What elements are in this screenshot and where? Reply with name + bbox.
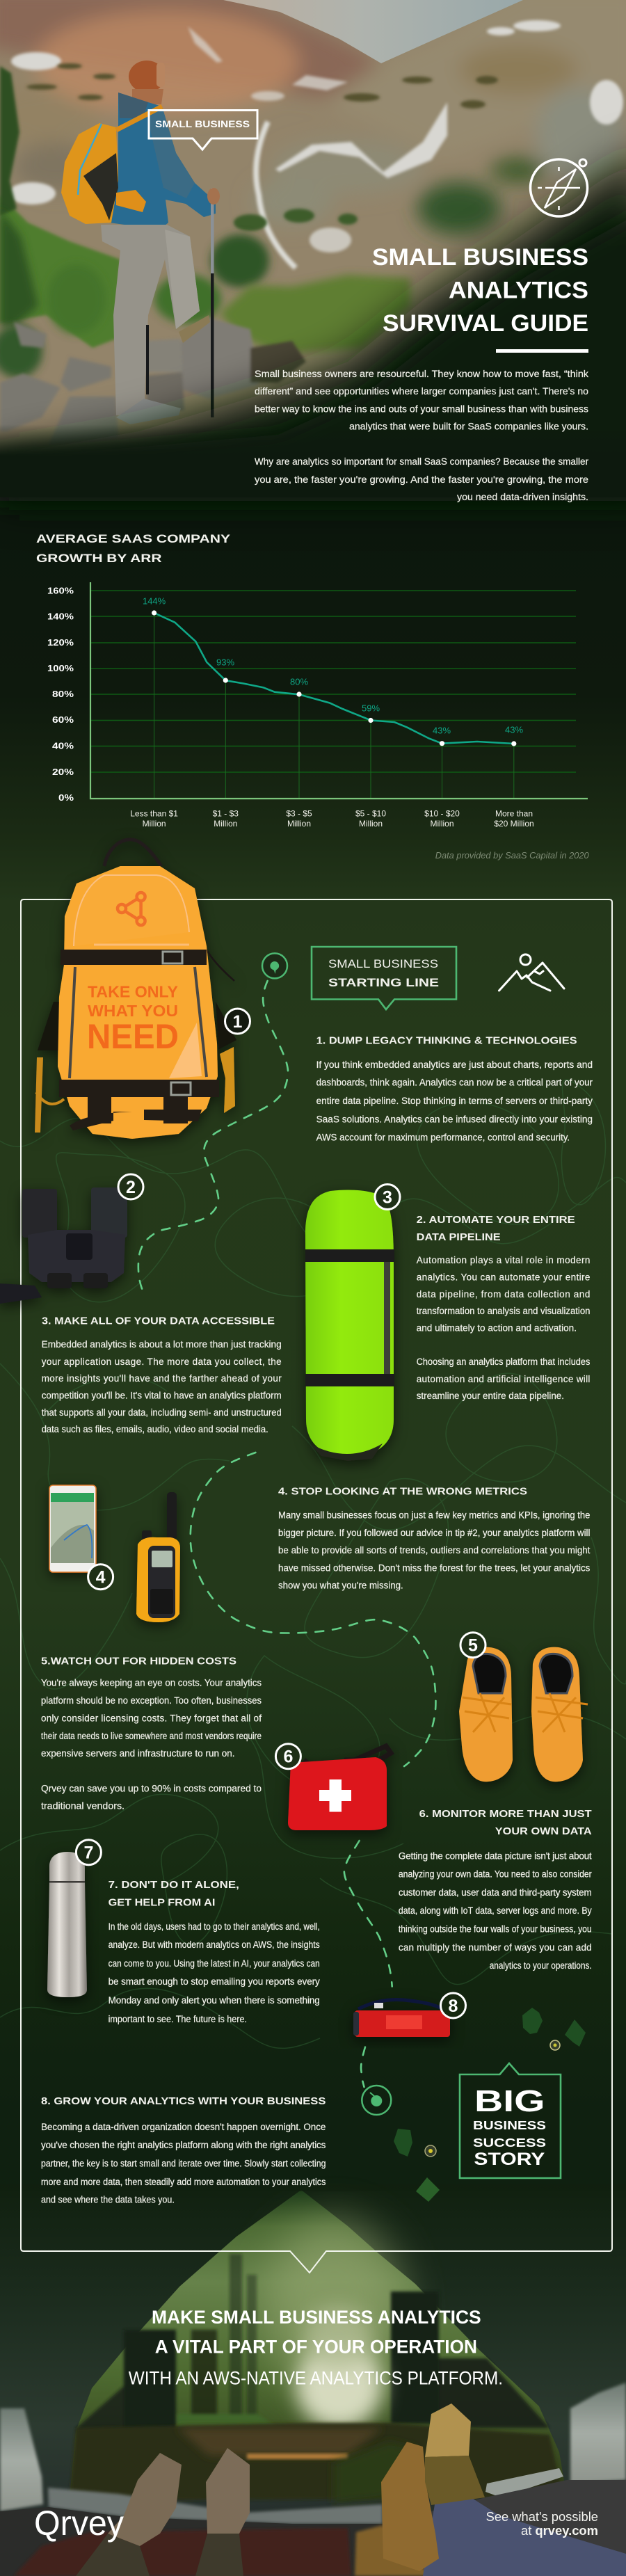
tip 5 body: only consider licensing costs. They forget that all of bbox=[41, 1713, 262, 1723]
icon: compass bbox=[530, 159, 587, 216]
line chart: growth by ARR: Million bbox=[359, 819, 383, 829]
marker 7: 7 bbox=[83, 1843, 93, 1863]
tip 5 body: You're always keeping an eye on costs. Your analytics bbox=[41, 1678, 262, 1688]
tip 8 body: and see where the data takes you. bbox=[41, 2195, 175, 2205]
tip 2 bbox=[417, 1214, 591, 1401]
line chart: growth by ARR: 43% bbox=[505, 725, 523, 735]
line chart: growth by ARR: Million bbox=[143, 819, 166, 829]
line chart: growth by ARR: 100% bbox=[47, 664, 74, 673]
jeans bbox=[423, 2493, 626, 2576]
tip 5 bbox=[41, 1655, 262, 1811]
tip 6 body: thinking outside the four walls of your business, you bbox=[399, 1923, 592, 1934]
tip 2 heading: 2. AUTOMATE YOUR ENTIRE bbox=[417, 1214, 575, 1226]
callout: starting line: STARTING LINE bbox=[328, 976, 439, 989]
marker 2 bbox=[118, 1174, 143, 1199]
tip 3 body: that supports all your data, including semi- and unstructured bbox=[42, 1407, 282, 1418]
closing headline bbox=[129, 2307, 503, 2389]
icon: flashlight bbox=[353, 1999, 450, 2037]
line chart: growth by ARR: Less than $1 bbox=[130, 808, 178, 818]
tip 5 body: platform should be no exception. Too often, businesses bbox=[41, 1695, 262, 1706]
tip 6 bbox=[399, 1808, 592, 1971]
title: ANALYTICS bbox=[449, 277, 588, 303]
callout: big business success story: BUSINESS bbox=[473, 2118, 546, 2132]
tip 6 body: customer data, user data and third-party system bbox=[399, 1887, 592, 1898]
tip 8 body bbox=[41, 2122, 326, 2205]
tip 5 body: their data needs to live somewhere and most vendors require bbox=[41, 1731, 262, 1741]
line chart: growth by ARR bbox=[47, 582, 588, 829]
tip 6 heading: YOUR OWN DATA bbox=[495, 1825, 592, 1837]
tip 2 body: Choosing an analytics platform that includes bbox=[417, 1357, 591, 1367]
tip 7 body: In the old days, users had to go to their analytics and, well, bbox=[109, 1921, 320, 1932]
tip 1 body: If you think embedded analytics are just about charts, reports and bbox=[316, 1059, 593, 1070]
intro text: Small business owners are resourceful. They know how to move fast, “think bbox=[255, 369, 588, 379]
tip 2 body bbox=[417, 1255, 591, 1401]
tip 7 body: important to see. The future is here. bbox=[109, 2014, 247, 2024]
tip 8 body: more and more data, then steadily add more automation to your analytics bbox=[41, 2177, 326, 2187]
title: SURVIVAL GUIDE bbox=[383, 310, 588, 337]
tip 3 bbox=[42, 1315, 282, 1434]
tip 5 body bbox=[41, 1678, 262, 1811]
line chart: growth by ARR: 59% bbox=[362, 703, 380, 713]
line chart: growth by ARR: 93% bbox=[216, 657, 234, 667]
tip 7 heading bbox=[109, 1879, 239, 1908]
tip 8 bbox=[41, 2095, 326, 2205]
tip 6 body: analytics to your operations. bbox=[490, 1960, 592, 1971]
tip 1 body: AWS account for maximum performance, control and security. bbox=[316, 1133, 570, 1143]
tip 1 body bbox=[316, 1059, 593, 1143]
tip 6 body: Getting the complete data picture isn't just about bbox=[399, 1851, 592, 1862]
call to action: See what's possible bbox=[486, 2510, 598, 2524]
tip 6 body: analyzing your own data. You need to also consider bbox=[399, 1869, 592, 1880]
tip 5 heading: 5.WATCH OUT FOR HIDDEN COSTS bbox=[41, 1655, 236, 1667]
line chart: growth by ARR: 144% bbox=[143, 596, 166, 607]
tip 7 heading: 7. DON'T DO IT ALONE, bbox=[109, 1879, 239, 1891]
tip 3 body: competition you'll be. It's vital to have an analytics platform bbox=[42, 1390, 282, 1401]
tip 3 body: Embedded analytics is about a lot more than just tracking bbox=[42, 1339, 282, 1350]
tip 2 body: and ultimately to action and activation. bbox=[417, 1323, 577, 1334]
marker 8 bbox=[441, 1993, 466, 2018]
intro text: you are, the faster you're growing. And the faster you're growing, the more bbox=[255, 474, 588, 485]
intro text: Why are analytics so important for small SaaS companies? Because the smaller bbox=[255, 456, 588, 467]
backpack slogan: TAKE ONLY bbox=[88, 982, 178, 1000]
icon: binoculars bbox=[0, 1187, 127, 1304]
line chart: growth by ARR: Million bbox=[430, 819, 454, 829]
tip 1 body: SaaS solutions. Analytics can be infused directly into your existing bbox=[316, 1114, 593, 1124]
line chart: growth by ARR: Million bbox=[214, 819, 237, 829]
marker 8: 8 bbox=[449, 1997, 458, 2016]
marker 4: 4 bbox=[96, 1568, 106, 1587]
tip 2 heading bbox=[417, 1214, 575, 1243]
trousers bbox=[101, 225, 200, 415]
closing headline: WITH AN AWS-NATIVE ANALYTICS PLATFORM. bbox=[129, 2368, 503, 2389]
icon: start pin bbox=[262, 953, 287, 978]
call to action bbox=[486, 2510, 598, 2538]
intro text: better way to know the ins and outs of your small business than with business bbox=[255, 403, 588, 415]
chart heading: AVERAGE SAAS COMPANY bbox=[36, 532, 231, 545]
marker 6: 6 bbox=[283, 1747, 293, 1767]
tip 4 heading: 4. STOP LOOKING AT THE WRONG METRICS bbox=[278, 1486, 527, 1497]
tip 1 body: dashboards, think again. Analytics can now be a critical part of your bbox=[316, 1078, 593, 1088]
marker 2: 2 bbox=[126, 1178, 136, 1197]
line chart: growth by ARR: More than bbox=[495, 808, 533, 818]
tip 7 body: analyze. But with modern analytics on AWS, the insights bbox=[109, 1939, 320, 1950]
callout: big business success story: STORY bbox=[474, 2150, 545, 2169]
tip 5 body: traditional vendors. bbox=[41, 1801, 125, 1811]
tip 8 body: partner, the key is to start small and iterate over time. Slowly start collecting bbox=[41, 2159, 326, 2169]
callout: starting line: SMALL BUSINESS bbox=[328, 957, 438, 970]
marker 5: 5 bbox=[468, 1636, 478, 1656]
marker 4 bbox=[88, 1565, 113, 1590]
tip 6 heading: 6. MONITOR MORE THAN JUST bbox=[419, 1808, 592, 1820]
line chart: growth by ARR: 80% bbox=[52, 689, 74, 699]
tip 4 body: have missed otherwise. Don't miss the forest for the trees, let your analytics bbox=[278, 1562, 591, 1573]
callout: big business success story: BIG bbox=[474, 2084, 545, 2118]
footer photo: view from tent bbox=[0, 2184, 626, 2576]
line chart: growth by ARR: 40% bbox=[52, 742, 74, 751]
logo: Qrvey: Qrvey bbox=[34, 2504, 124, 2543]
tip 6 heading bbox=[419, 1808, 592, 1837]
line chart: growth by ARR: 20% bbox=[52, 767, 74, 777]
icon: sleeping bag bbox=[305, 1190, 394, 1461]
icon: thermos bbox=[47, 1852, 87, 1997]
tip 7 bbox=[109, 1879, 320, 2024]
tip 3 heading: 3. MAKE ALL OF YOUR DATA ACCESSIBLE bbox=[42, 1315, 275, 1327]
tip 5 body: expensive servers and infrastructure to run on. bbox=[41, 1748, 235, 1759]
tip 7 body: Monday and only alert you when there is something bbox=[109, 1995, 320, 2006]
callout: big business success story: SUCCESS bbox=[473, 2136, 546, 2150]
icon: end pin bbox=[362, 2086, 391, 2115]
line chart: growth by ARR: $20 Million bbox=[494, 819, 534, 829]
tip 2 body: Automation plays a vital role in modern bbox=[417, 1255, 590, 1265]
icon: walkie talkie bbox=[136, 1492, 180, 1622]
tip 4 bbox=[278, 1486, 591, 1591]
tip 4 body: show you what you're missing. bbox=[278, 1581, 403, 1591]
backpack slogan bbox=[87, 982, 179, 1056]
icon: backpack bbox=[35, 840, 236, 1139]
callout: starting line bbox=[312, 947, 456, 1009]
poles bbox=[211, 188, 214, 273]
tip 4 body: be able to provide all sorts of trends, outliers and correlations that you might bbox=[278, 1545, 591, 1555]
head bbox=[129, 61, 165, 93]
marker 5 bbox=[460, 1633, 485, 1658]
icon: phone with map bbox=[49, 1485, 96, 1572]
tip 6 body: data, along with IoT data, server logs and more. By bbox=[399, 1905, 592, 1916]
line chart: growth by ARR: 43% bbox=[433, 725, 451, 735]
line chart: growth by ARR: $5 - $10 bbox=[355, 808, 386, 818]
tip 3 body: data such as files, emails, audio, video and social media. bbox=[42, 1424, 268, 1434]
tip 8 heading: 8. GROW YOUR ANALYTICS WITH YOUR BUSINESS bbox=[41, 2095, 326, 2107]
line chart: growth by ARR: 160% bbox=[47, 586, 74, 595]
line chart: growth by ARR: 120% bbox=[47, 638, 74, 648]
line chart: growth by ARR: 60% bbox=[52, 715, 74, 725]
call to action: at qrvey.com bbox=[521, 2524, 598, 2538]
tip 4 body bbox=[278, 1510, 591, 1591]
panel: survival guide frame bbox=[21, 899, 612, 2273]
callout: small business: SMALL BUSINESS bbox=[155, 118, 250, 129]
tip 1 heading: 1. DUMP LEGACY THINKING & TECHNOLOGIES bbox=[316, 1034, 577, 1046]
marker 7 bbox=[76, 1840, 101, 1865]
jacket bbox=[109, 93, 216, 230]
marker 1 bbox=[225, 1009, 250, 1034]
marker 3: 3 bbox=[383, 1188, 392, 1208]
tip 3 body: more insights you'll have and the farther ahead of your bbox=[42, 1373, 282, 1384]
tip 5 body: Qrvey can save you up to 90% in costs compared to bbox=[41, 1784, 262, 1794]
backpack bbox=[61, 123, 118, 224]
closing headline: A VITAL PART OF YOUR OPERATION bbox=[155, 2337, 477, 2358]
intro text: you need data-driven insights. bbox=[457, 492, 588, 502]
icon: first aid kit bbox=[288, 1746, 391, 1830]
line chart: growth by ARR: 80% bbox=[290, 676, 308, 687]
intro text: analytics that were built for SaaS companies like yours. bbox=[349, 422, 588, 431]
tip 1 body: entire data pipeline. Stop thinking in terms of servers or third-party bbox=[316, 1096, 593, 1106]
title rule bbox=[496, 349, 588, 353]
tip 4 body: Many small businesses focus on just a few key metrics and KPIs, ignoring the bbox=[278, 1510, 590, 1521]
marker 6 bbox=[275, 1744, 300, 1769]
tip 8 body: you've chosen the right analytics platform along with the right analytics bbox=[41, 2140, 326, 2150]
tip 7 body: can come to you. Using the latest in AI, your analytics can bbox=[109, 1958, 320, 1969]
title: SMALL BUSINESS bbox=[372, 244, 588, 271]
intro text: different” and see opportunities where larger companies just can't. There's no bbox=[255, 386, 588, 397]
tip 2 body: data pipeline, from data collection and bbox=[417, 1289, 590, 1299]
tip 2 body: analytics. You can automate your entire bbox=[417, 1272, 590, 1283]
tip 7 body bbox=[109, 1921, 320, 2024]
intro text bbox=[255, 369, 588, 502]
background topographic lines bbox=[0, 1080, 626, 2048]
tip 6 body bbox=[399, 1851, 592, 1971]
backpack slogan: NEED bbox=[87, 1017, 179, 1056]
tip 1 bbox=[316, 1034, 593, 1143]
tip 3 body bbox=[42, 1339, 282, 1434]
chart heading: GROWTH BY ARR bbox=[36, 552, 161, 565]
boots bbox=[76, 2534, 150, 2576]
tip 4 body: bigger picture. If you followed our advice in tip #2, your analytics platform will bbox=[278, 1528, 590, 1538]
tip 3 body: your application usage. The more data you collect, the bbox=[42, 1357, 282, 1367]
chart heading bbox=[36, 532, 231, 565]
decor: leaves and small compasses bbox=[394, 2008, 586, 2202]
bushes bbox=[0, 66, 410, 378]
tip 8 body: Becoming a data-driven organization doesn't happen overnight. Once bbox=[41, 2122, 326, 2132]
title bbox=[372, 244, 588, 337]
tip 2 heading: DATA PIPELINE bbox=[417, 1231, 501, 1243]
line chart: growth by ARR: $10 - $20 bbox=[424, 808, 460, 818]
line chart: growth by ARR: 0% bbox=[58, 793, 74, 803]
line chart: growth by ARR: $1 - $3 bbox=[213, 808, 239, 818]
tip 7 heading: GET HELP FROM AI bbox=[109, 1896, 215, 1908]
tip 2 body: transformation to analysis and visualization bbox=[417, 1306, 590, 1316]
callout: big business success story bbox=[460, 2063, 561, 2178]
trail: dashed route bbox=[138, 981, 435, 2087]
line chart: growth by ARR: $3 - $5 bbox=[286, 808, 312, 818]
tip 2 body: automation and artificial intelligence will bbox=[417, 1374, 590, 1384]
hiker bbox=[61, 61, 220, 424]
closing headline: MAKE SMALL BUSINESS ANALYTICS bbox=[152, 2307, 481, 2328]
icon: hiking boots bbox=[459, 1647, 588, 1782]
marker 3 bbox=[375, 1184, 400, 1209]
line chart: growth by ARR: 140% bbox=[47, 612, 74, 622]
chart source note: Data provided by SaaS Capital in 2020 bbox=[435, 850, 589, 861]
icon: mountains and sun bbox=[499, 954, 564, 991]
line chart: growth by ARR: Million bbox=[287, 819, 311, 829]
boots bbox=[179, 315, 210, 343]
callout: small business bbox=[149, 110, 257, 150]
marker 1: 1 bbox=[233, 1012, 243, 1032]
rocks bbox=[0, 318, 306, 445]
tip 2 body: streamline your entire data pipeline. bbox=[417, 1391, 564, 1401]
hero photo: hiker overlooking mountains bbox=[0, 0, 626, 501]
dark diagonal fade bbox=[0, 150, 626, 501]
backpack slogan: WHAT YOU bbox=[88, 1002, 178, 1020]
tip 7 body: be smart enough to stop emailing you reports every bbox=[109, 1976, 320, 1987]
backpack logo bbox=[118, 893, 145, 925]
tip 6 body: can multiply the number of ways you can add bbox=[399, 1942, 592, 1953]
